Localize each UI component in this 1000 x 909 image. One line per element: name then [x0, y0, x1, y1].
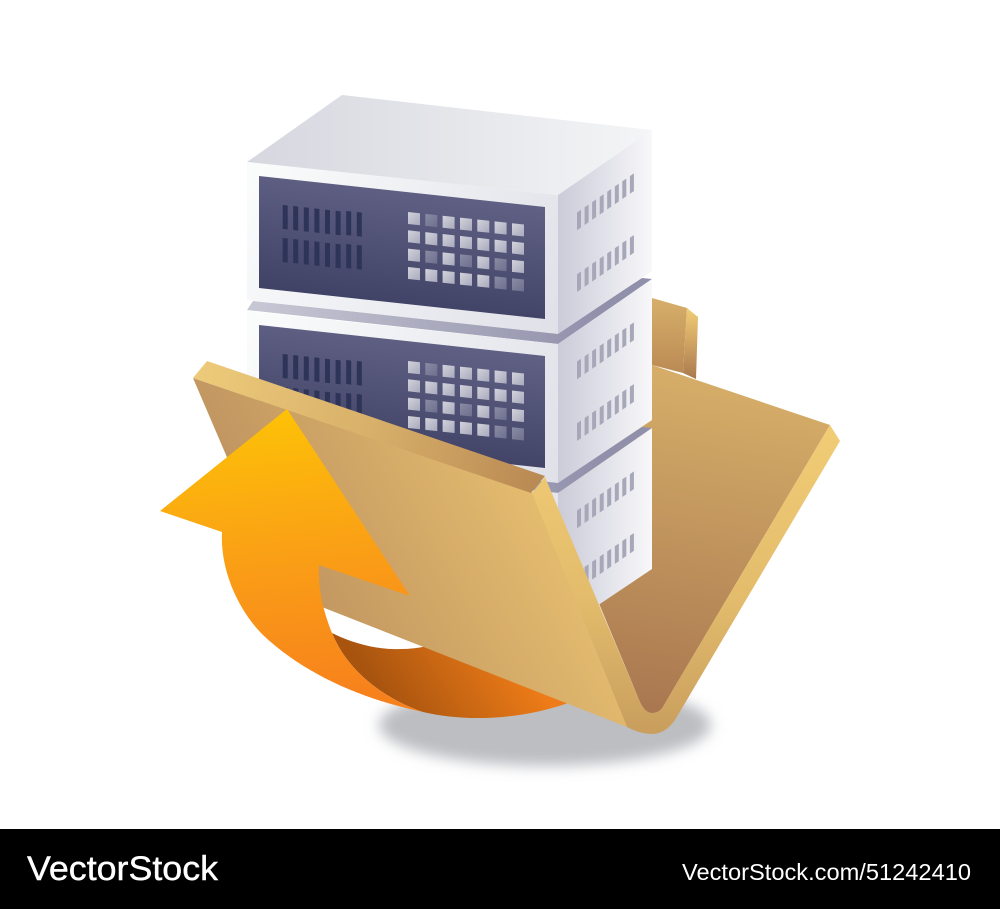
- server unit 1 (top): [247, 95, 652, 334]
- server stack: [247, 95, 652, 632]
- server unit 2 (middle): [247, 278, 652, 483]
- arrow dark underside: [332, 633, 572, 718]
- back panel interior: [560, 365, 830, 713]
- footer image id text: VectorStock.com/51242410: [682, 859, 971, 885]
- footer bar: [0, 829, 1000, 909]
- flap top edge: [193, 361, 545, 493]
- back flap tab: [652, 298, 687, 373]
- folder front flap: [193, 361, 840, 734]
- footer logo text: VectorStock: [27, 850, 219, 888]
- ground shadow: [379, 684, 711, 766]
- folder rim: [532, 425, 840, 734]
- flap face: [193, 378, 634, 727]
- curved orange arrow: [160, 409, 423, 712]
- server unit 3 (bottom): [247, 427, 652, 632]
- back flap edge: [683, 308, 698, 379]
- folder back panel: [560, 298, 830, 713]
